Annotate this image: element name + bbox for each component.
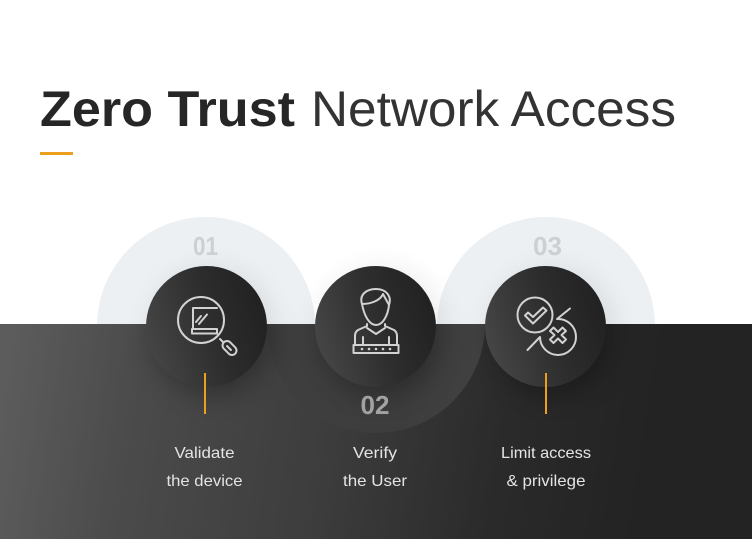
title: Network Access: [311, 81, 676, 137]
dark band: [0, 324, 752, 539]
icon: laptop under magnifier: [178, 297, 238, 357]
label: step 02: the User: [343, 473, 408, 490]
step number 02: 02: [360, 390, 390, 420]
step number 01: 01: [193, 231, 218, 261]
dark circle: step 02 backdrop: [267, 324, 485, 433]
step 02 disc and icon: [315, 266, 436, 387]
label: step 01: [166, 445, 243, 490]
title accent line: [40, 152, 73, 155]
icon: check and cross: [518, 298, 576, 355]
step number 03: 03: [533, 231, 562, 261]
label: step 03: [501, 445, 591, 490]
light circle: step 01: [97, 217, 315, 324]
label: step 02: Verify: [353, 445, 397, 462]
connector line: step 01: [204, 373, 206, 414]
label: step 03: Limit access: [501, 445, 591, 462]
label: step 01: Validate: [174, 445, 235, 462]
light circle: step 03: [437, 217, 655, 324]
label: step 02: [343, 445, 408, 490]
keyboard keys: [361, 348, 391, 350]
icon: user at keyboard: [354, 289, 398, 353]
step 01 disc and icon: [146, 266, 267, 387]
label: step 01: the device: [166, 473, 243, 490]
soft disc shadows above the band: [217, 266, 616, 324]
connector line: step 03: [545, 373, 547, 414]
label: step 03: & privilege: [506, 473, 586, 490]
disc shadows: [152, 324, 598, 398]
title: Zero Trust: [40, 81, 295, 137]
step 03 disc and icon: [485, 266, 606, 387]
